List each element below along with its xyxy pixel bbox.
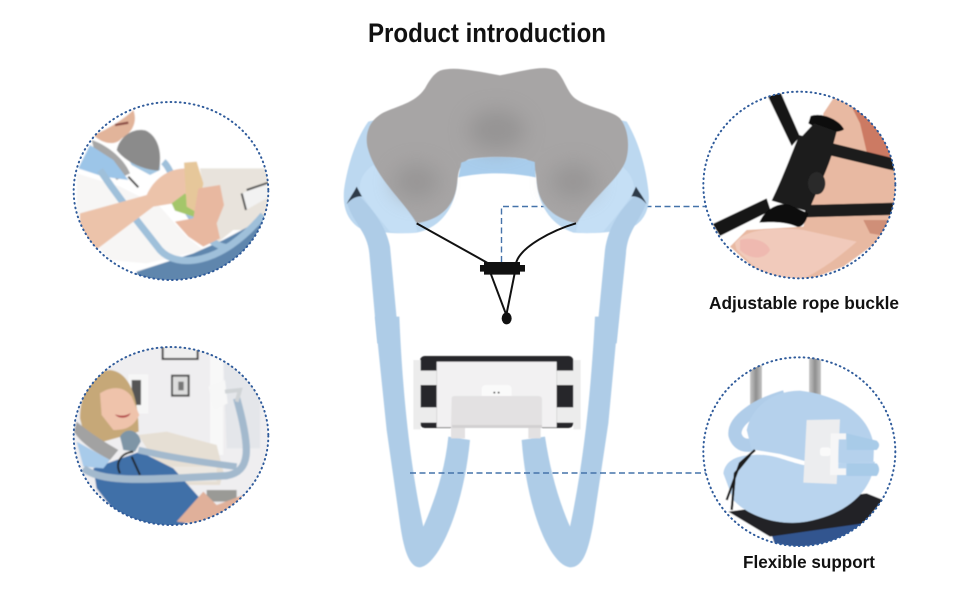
arm and hand	[80, 168, 200, 249]
drawstring cord	[417, 223, 576, 313]
sofa	[138, 432, 223, 485]
dotted border	[74, 347, 268, 525]
face	[100, 388, 139, 430]
window	[223, 358, 260, 448]
left tube upper	[347, 197, 399, 343]
sofa	[200, 168, 273, 243]
plush shading	[393, 110, 597, 200]
hair	[80, 370, 139, 442]
pillow top lobe	[747, 391, 874, 465]
right flap	[576, 165, 634, 233]
photo circle: rope buckle close-up	[702, 90, 896, 280]
cord lock	[480, 262, 525, 275]
cords	[767, 93, 800, 146]
label: flexible support: Flexible support	[743, 552, 875, 572]
tube ends	[847, 433, 879, 450]
dotted border	[703, 92, 895, 278]
blue crescent	[458, 157, 536, 177]
holder tubes	[100, 170, 263, 261]
outer right tube to inner clamp arm	[522, 317, 618, 567]
thumb	[735, 229, 857, 280]
dotted border	[74, 102, 268, 280]
cord	[727, 450, 755, 510]
dotted border	[703, 357, 895, 546]
title: Product introduction	[368, 18, 606, 48]
white holder	[803, 419, 840, 484]
photo circle: woman relaxing with holder	[72, 346, 270, 526]
phone back	[420, 356, 573, 428]
label: adjustable rope buckle: Adjustable rope buckle	[709, 293, 899, 313]
poles	[750, 365, 762, 408]
wall art	[163, 345, 198, 359]
center plate	[437, 362, 557, 427]
left flap	[360, 165, 417, 233]
phone	[242, 184, 268, 209]
tubes	[83, 398, 246, 479]
pillow	[74, 422, 118, 460]
buckle body	[772, 135, 834, 212]
joint	[482, 385, 512, 400]
phone holder	[224, 381, 228, 404]
outer left tube to inner clamp arm	[375, 317, 470, 567]
gray plush	[367, 68, 628, 223]
tube loop	[735, 397, 785, 445]
product: phone holder and lower tubes	[375, 317, 618, 567]
pillow bottom lobe	[723, 455, 875, 523]
product: neck pillow with cord	[344, 68, 649, 343]
shirt	[93, 452, 200, 527]
second hand	[175, 185, 224, 247]
right tube upper	[596, 197, 646, 343]
white side strips	[413, 360, 581, 429]
dashed connector: rope buckle	[502, 206, 707, 262]
jeans	[136, 220, 263, 280]
photo circle: man eating with holder	[72, 101, 270, 281]
dashed connector: flexible support	[410, 472, 707, 474]
shirt	[77, 173, 203, 263]
pillow	[92, 140, 130, 180]
clamp bar	[451, 396, 542, 438]
photo circle: folded flexible support	[702, 356, 896, 547]
buckle top cap	[808, 115, 844, 132]
hand and cup	[207, 490, 237, 502]
hand	[730, 98, 900, 283]
face	[93, 110, 135, 143]
blue pillow cover	[344, 90, 649, 233]
dark notches	[347, 187, 647, 204]
base	[772, 513, 872, 546]
cord	[118, 452, 140, 475]
buckle bottom cap	[759, 204, 808, 227]
sandwich	[172, 193, 200, 217]
